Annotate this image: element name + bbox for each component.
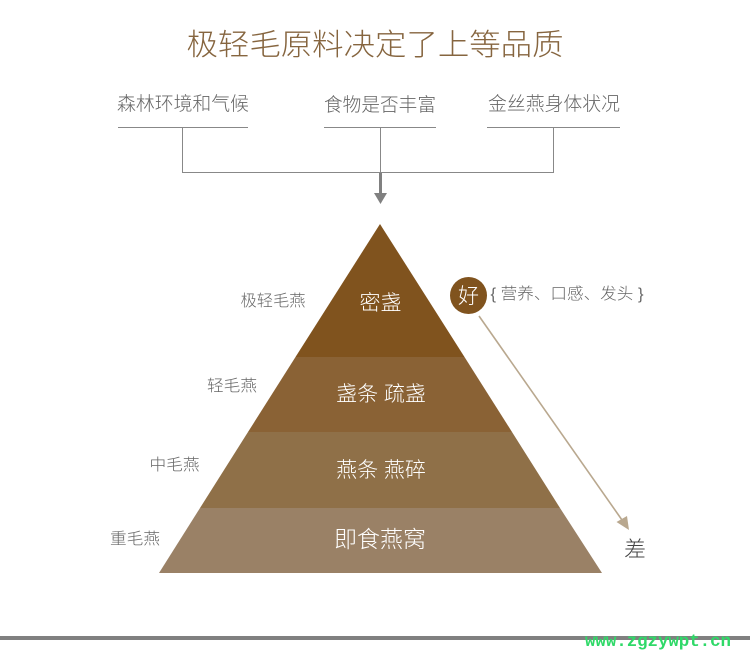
tier 2: 盏条 疏盏 bbox=[248, 357, 512, 432]
tier 4: 即食燕窝 bbox=[159, 508, 602, 573]
arrow: good to poor bbox=[479, 316, 629, 530]
quality criteria note: { 营养、口感、发头 } bbox=[490, 285, 644, 303]
bottom rule bbox=[0, 636, 750, 640]
tier 4: 即食燕窝: 即食燕窝 bbox=[334, 526, 426, 552]
pyramid bbox=[159, 224, 602, 573]
badge: good: 好 bbox=[458, 285, 479, 308]
watermark: www.zgzywpt.cn bbox=[585, 632, 731, 652]
tier 2: 盏条 疏盏: 盏条 疏盏 bbox=[336, 383, 426, 406]
label: 轻毛燕: 轻毛燕 bbox=[207, 377, 257, 395]
tier 3: 燕条 燕碎: 燕条 燕碎 bbox=[336, 459, 426, 482]
label: 极轻毛燕: 极轻毛燕 bbox=[240, 292, 306, 310]
tier 3: 燕条 燕碎 bbox=[200, 432, 560, 508]
factor: food abundance bbox=[324, 94, 436, 128]
arrow: down to pyramid bbox=[374, 173, 387, 204]
factor: swiftlet health: 金丝燕身体状况 bbox=[488, 93, 620, 115]
badge: good bbox=[450, 277, 487, 314]
factor: forest environment and climate: 森林环境和气候 bbox=[117, 93, 249, 115]
factor: swiftlet health bbox=[487, 93, 620, 128]
connector lines bbox=[182, 127, 554, 172]
label: 重毛燕: 重毛燕 bbox=[110, 530, 160, 548]
factor: forest environment and climate bbox=[117, 93, 249, 128]
title: 极轻毛原料决定了上等品质 bbox=[186, 29, 564, 62]
factors and connector bbox=[117, 93, 620, 204]
tier labels bbox=[110, 292, 306, 548]
factor: food abundance: 食物是否丰富 bbox=[324, 94, 436, 116]
tier 1: 密盏 bbox=[296, 224, 464, 357]
label: poor: 差 bbox=[624, 537, 646, 562]
tier 1: 密盏: 密盏 bbox=[360, 292, 402, 315]
label: 中毛燕: 中毛燕 bbox=[150, 456, 200, 474]
quality scale bbox=[450, 277, 646, 562]
